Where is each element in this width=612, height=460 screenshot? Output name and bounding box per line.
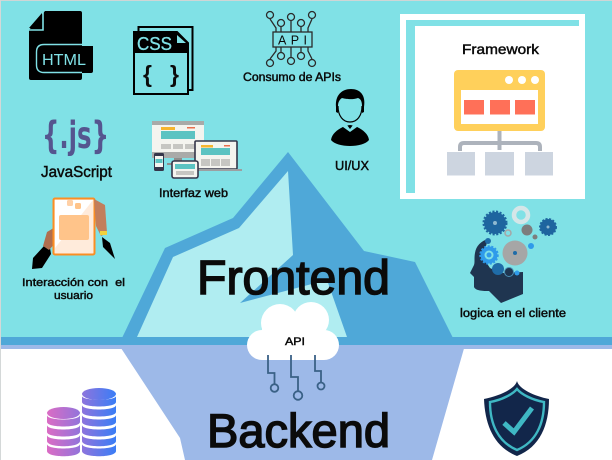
icon: HTML file: HTML bbox=[42, 52, 86, 69]
submerged iceberg bbox=[119, 345, 465, 460]
label: Interacción con el usuario bbox=[22, 277, 125, 302]
water line band bbox=[1, 337, 612, 345]
icon: CSS file: { } bbox=[143, 61, 179, 87]
label: Interacción con el usuario: usuario bbox=[54, 290, 93, 302]
cloud label: API: API bbox=[285, 336, 305, 348]
background: water surface sky bbox=[0, 0, 612, 340]
icon: head with gears bbox=[470, 208, 556, 303]
heading: Framework: Framework bbox=[462, 41, 540, 57]
icon: HTML file bbox=[29, 11, 93, 80]
icon: responsive devices bbox=[152, 121, 242, 178]
heading: Backend: Backend bbox=[207, 404, 390, 457]
label: Consumo de APIs: Consumo de APIs bbox=[243, 72, 341, 84]
icon: database stacks bbox=[47, 388, 116, 456]
panel: Framework bbox=[400, 14, 585, 199]
icon: API circuit: API bbox=[278, 34, 307, 48]
heading: Frontend: Frontend bbox=[197, 252, 390, 305]
icon: hands holding tablet bbox=[32, 198, 115, 269]
icon: JavaScript braces: {.js} bbox=[42, 114, 109, 157]
icon: CSS file bbox=[133, 27, 192, 94]
icon: API circuit bbox=[266, 12, 316, 66]
icon: CSS file: CSS bbox=[137, 34, 172, 54]
iceberg above water bbox=[122, 152, 453, 338]
circuit lines under cloud bbox=[268, 355, 324, 400]
icon: security shield bbox=[484, 381, 549, 456]
icon: UI/UX person bbox=[331, 89, 369, 146]
label: JavaScript: JavaScript bbox=[41, 164, 113, 181]
label: Interacción con el usuario: Interacción con el bbox=[22, 277, 125, 289]
label: Interfaz web: Interfaz web bbox=[159, 186, 228, 200]
label: logica en el cliente: logica en el cliente bbox=[460, 308, 566, 320]
background: lower white area bbox=[0, 349, 612, 460]
label: UI/UX: UI/UX bbox=[335, 158, 369, 173]
diagram: window and tree bbox=[447, 70, 553, 176]
icon: API cloud bbox=[247, 302, 339, 400]
